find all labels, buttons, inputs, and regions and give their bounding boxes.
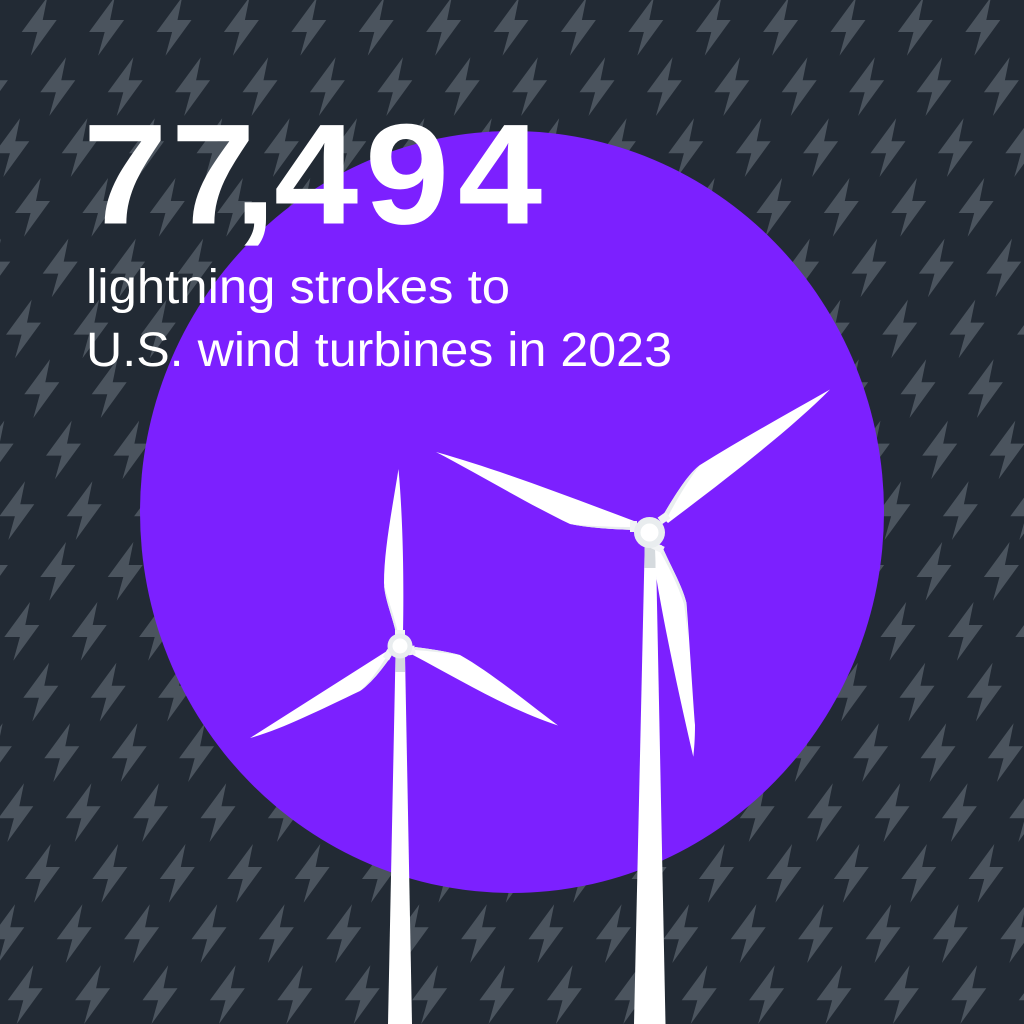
- hub root stubs: [630, 512, 670, 553]
- blade upper right: [662, 390, 830, 523]
- blade up: [384, 469, 403, 633]
- hub: [388, 634, 412, 658]
- blade upper right edge shade: [662, 465, 700, 520]
- blade left: [436, 452, 634, 530]
- blade right: [413, 647, 558, 726]
- subtitle: [86, 261, 672, 377]
- big number: 77,494: [83, 95, 542, 255]
- blade left edge shade: [360, 656, 390, 691]
- large wind turbine: [436, 390, 830, 1024]
- blade left: [250, 651, 390, 738]
- tower: [388, 655, 412, 1024]
- tower: [634, 555, 666, 1024]
- hub centre: [640, 524, 658, 542]
- small wind turbine: [250, 469, 558, 1024]
- blade lower right: [655, 545, 695, 757]
- blade up edge shade: [384, 585, 398, 633]
- subtitle line 1: lightning strokes to: [86, 261, 510, 314]
- hub: [634, 517, 665, 548]
- purple circle: [140, 131, 884, 893]
- hub root stubs: [383, 630, 416, 660]
- tower shadow: [644, 546, 656, 568]
- blade left edge shade: [570, 524, 634, 530]
- blade right edge shade: [414, 647, 460, 655]
- hub centre: [392, 638, 408, 654]
- subtitle line 2: U.S. wind turbines in 2023: [86, 324, 672, 377]
- tower shadow: [396, 655, 405, 672]
- blade lower right edge shade: [658, 545, 689, 655]
